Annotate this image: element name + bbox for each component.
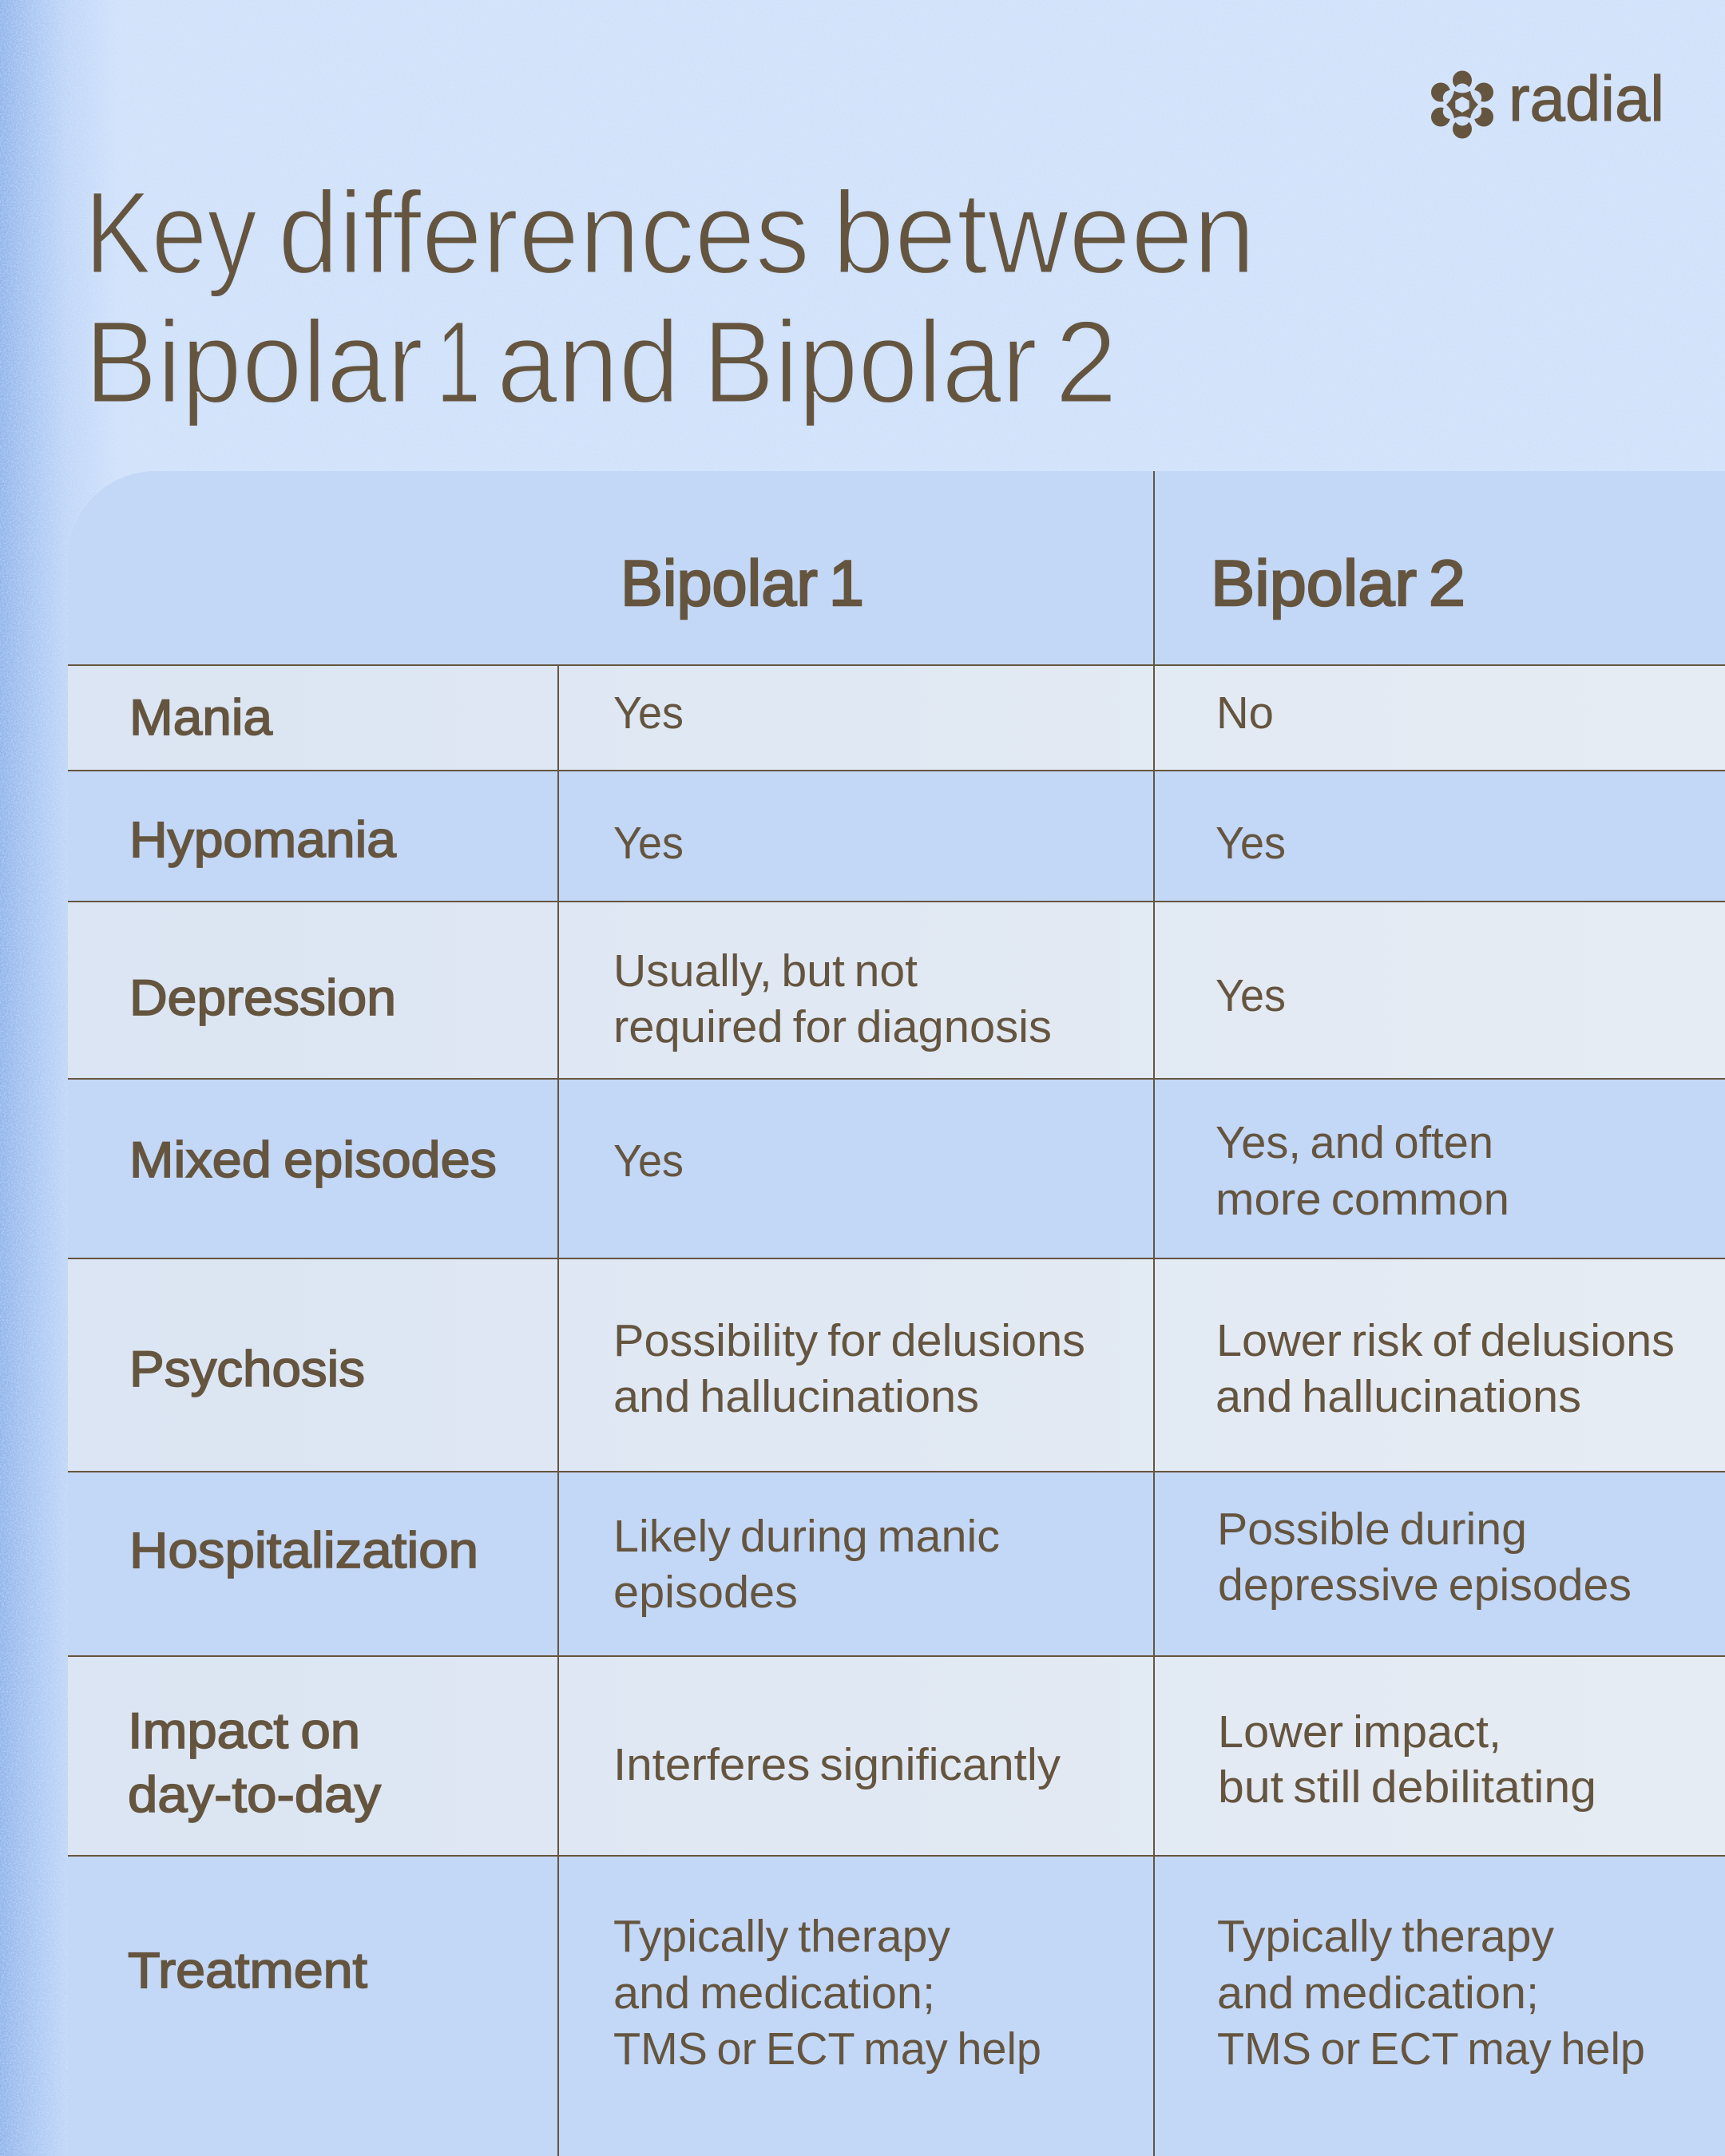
row: Psychosis: Psychosis bbox=[129, 1342, 365, 1397]
row: Bipolar column headers: Bipolar 2 bbox=[1211, 548, 1465, 620]
row: Treatment: and medication; bbox=[613, 1968, 935, 2019]
title: Bipolar bbox=[703, 297, 1037, 428]
row: Psychosis: Possibility for delusions bbox=[613, 1315, 1085, 1366]
row: Depression: required for diagnosis bbox=[613, 1001, 1052, 1052]
row: Depression: Usually, but not bbox=[613, 945, 918, 997]
title bbox=[85, 168, 1255, 428]
row: Mixed episodes: Yes bbox=[613, 1135, 684, 1187]
row: Treatment: and medication; bbox=[1217, 1968, 1539, 2019]
row: Bipolar column headers: Bipolar 1 bbox=[621, 548, 864, 620]
row: Hypomania bbox=[129, 812, 1286, 869]
row: Treatment: Typically therapy bbox=[1217, 1911, 1554, 1962]
row: Hospitalization: depressive episodes bbox=[1218, 1560, 1632, 1611]
row: Hospitalization: Hospitalization bbox=[129, 1523, 478, 1579]
row: Hospitalization: Likely during manic bbox=[613, 1511, 1000, 1562]
title: 1 bbox=[436, 297, 481, 428]
row: Mania: Yes bbox=[613, 688, 684, 739]
row: Bipolar column headers bbox=[621, 548, 1465, 620]
row: Psychosis: and hallucinations bbox=[613, 1371, 979, 1422]
row: Psychosis: and hallucinations bbox=[1215, 1371, 1581, 1422]
row: Mixed episodes: Mixed episodes bbox=[129, 1132, 497, 1188]
logo: radial bbox=[1431, 63, 1664, 139]
title: Key bbox=[85, 168, 257, 299]
icon: radial flower mark bbox=[1431, 70, 1493, 139]
row: Mania: No bbox=[1216, 688, 1274, 739]
title: between bbox=[832, 168, 1255, 299]
row: Hypomania: Hypomania bbox=[129, 812, 397, 868]
row: Impact on day-to-day bbox=[68, 1656, 1725, 1856]
row: Treatment: Treatment bbox=[128, 1943, 368, 1999]
row: Hypomania: Yes bbox=[1215, 818, 1286, 869]
logo wordmark: radial bbox=[1509, 63, 1664, 134]
row: Mixed episodes: more common bbox=[1215, 1174, 1509, 1225]
row: Mixed episodes: Yes, and often bbox=[1215, 1117, 1493, 1168]
title: and bbox=[497, 297, 680, 428]
row: Hospitalization: Possible during bbox=[1217, 1504, 1527, 1555]
row: Depression: Yes bbox=[1215, 970, 1286, 1021]
row: Treatment: TMS or ECT may help bbox=[1217, 2023, 1645, 2075]
row: Depression bbox=[68, 902, 1725, 1079]
row: Psychosis bbox=[68, 1258, 1725, 1472]
row: Impact on day-to-day: Interferes significantly bbox=[613, 1739, 1061, 1790]
row: Mixed episodes bbox=[129, 1117, 1509, 1225]
table panel bbox=[68, 471, 1725, 2156]
row: Hospitalization bbox=[129, 1504, 1632, 1618]
row: Mania bbox=[68, 665, 1725, 771]
row: Treatment bbox=[128, 1911, 1645, 2075]
row: Mania: Mania bbox=[129, 690, 273, 746]
title: Bipolar bbox=[85, 297, 423, 428]
row: Impact on day-to-day: but still debilitating bbox=[1218, 1762, 1596, 1813]
row: Hypomania: Yes bbox=[613, 818, 684, 869]
title: 2 bbox=[1055, 297, 1117, 428]
row: Impact on day-to-day: Lower impact, bbox=[1218, 1706, 1501, 1758]
row: Impact on day-to-day: day-to-day bbox=[128, 1767, 382, 1823]
row: Treatment: TMS or ECT may help bbox=[613, 2023, 1041, 2075]
row: Treatment: Typically therapy bbox=[613, 1911, 950, 1962]
row: Hospitalization: episodes bbox=[613, 1567, 798, 1618]
row: Impact on day-to-day: Impact on bbox=[128, 1703, 360, 1759]
row: Psychosis: Lower risk of delusions bbox=[1216, 1315, 1675, 1366]
comparison table bbox=[68, 471, 1725, 2156]
row: Depression: Depression bbox=[129, 970, 396, 1026]
title: differences bbox=[278, 168, 810, 299]
